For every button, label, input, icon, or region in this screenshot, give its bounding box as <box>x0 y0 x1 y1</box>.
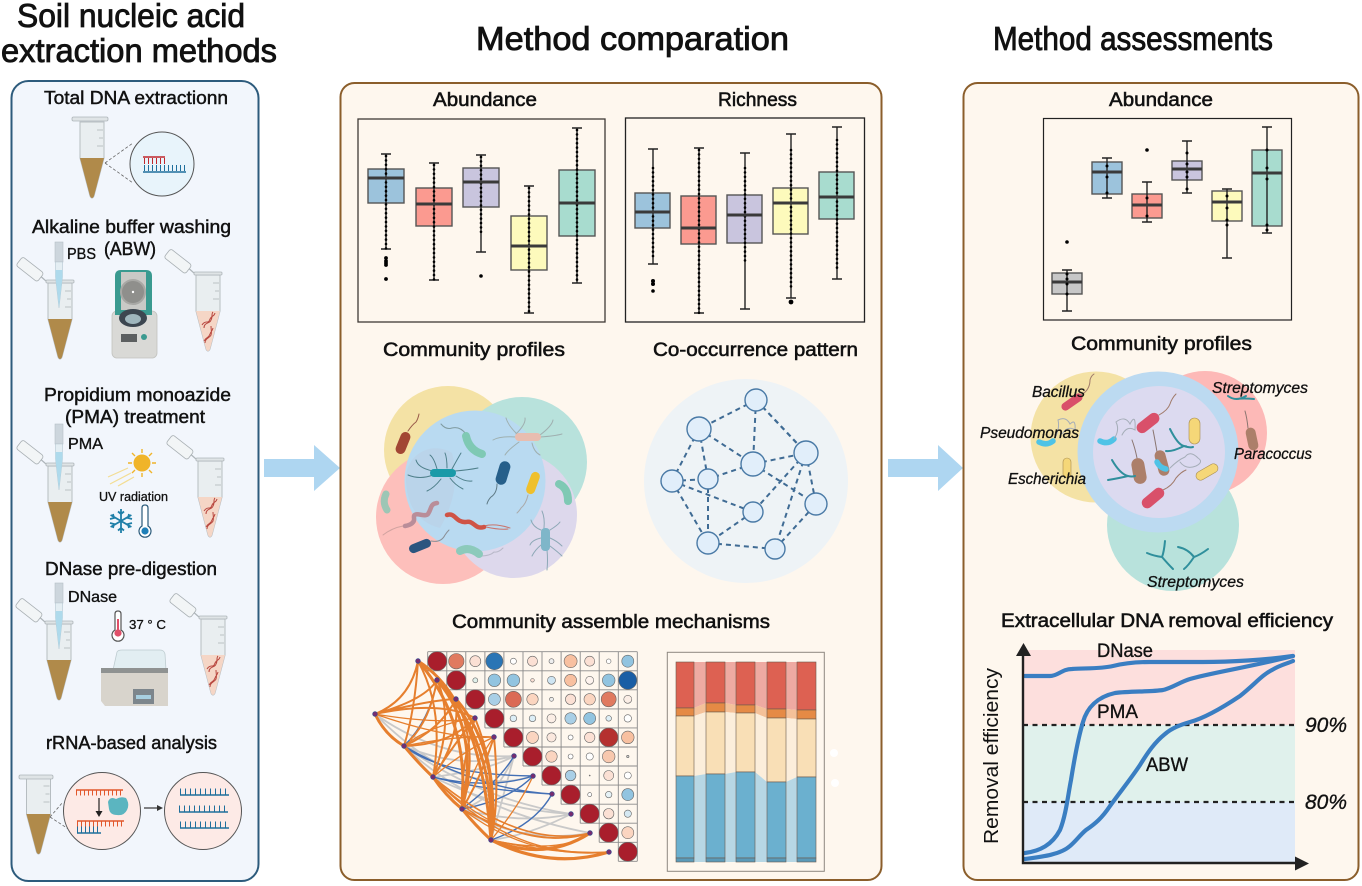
correlation matrix <box>428 652 637 861</box>
label: 80 percent: 80% <box>1305 791 1347 814</box>
label: PMA curve: PMA <box>1097 702 1138 723</box>
title: method comparation: Method comparation <box>476 20 789 57</box>
arrow: to amplified cDNA <box>144 805 163 811</box>
icon: tube with released DNA <box>164 249 222 351</box>
box plot: abundance <box>358 119 605 322</box>
icon: closed soil tube <box>72 117 108 198</box>
icon: sun with UV rays <box>108 449 156 486</box>
bacterium: teal curved bottom <box>460 548 503 556</box>
curve: PMA <box>1025 656 1293 853</box>
icon: water bath <box>101 650 168 706</box>
label: PMA: PMA <box>68 436 103 453</box>
label: propidium monoazide: Propidium monoazide <box>44 385 231 405</box>
bacteria: red rods <box>1060 374 1186 511</box>
box plot: abundance assessment <box>1044 118 1292 320</box>
icon: reverse transcription circle <box>50 772 140 850</box>
label: UV radiation: UV radiation <box>99 489 168 504</box>
panel: method comparation <box>340 83 882 880</box>
bacteria: cyan curved <box>1039 439 1166 469</box>
label: PMA treatment: (PMA) treatment <box>65 407 205 427</box>
bacteria: brown rods <box>1130 411 1259 485</box>
bacterium: navy rod bottom <box>408 530 449 554</box>
icon: soil tube with DNase pipette <box>15 583 73 700</box>
icon: soil tube with PMA pipette <box>16 424 74 542</box>
label: alkaline buffer washing: Alkaline buffer washing <box>32 217 231 237</box>
bacterium: teal curved top <box>441 424 482 454</box>
arrow: comparison to assessment <box>888 445 963 491</box>
bacterium: navy rod <box>487 460 512 504</box>
label: Pseudomonas: Pseudomonas <box>980 425 1079 442</box>
line chart: removal efficiency <box>981 641 1347 870</box>
label: Bacillus: Bacillus <box>1032 384 1085 401</box>
network: co-occurrence pattern <box>644 379 848 583</box>
label: removal efficiency axis: Removal efficiency <box>981 668 1003 844</box>
bacterium: blue rod with flagella <box>530 511 562 570</box>
icon: tube with released DNA after PMA <box>166 435 224 537</box>
network arcs: environmental links <box>375 661 609 859</box>
bacteria: teal branching <box>1108 396 1254 569</box>
icon: soil tube with PBS pipette <box>16 242 74 359</box>
bacteria: yellow rods <box>1063 418 1220 482</box>
title: soil nucleic acid extraction methods: extraction methods <box>1 32 277 69</box>
icon: warm thermometer <box>112 611 124 641</box>
icon: closed soil tube for rRNA <box>19 775 53 854</box>
heading: richness: Richness <box>718 90 797 111</box>
heading: community profiles: Community profiles <box>383 340 565 361</box>
curve: DNase <box>1025 656 1293 676</box>
icon: centrifuge <box>112 270 157 358</box>
label: ABW: (ABW) <box>104 239 156 259</box>
icon: DNA magnifier <box>105 132 194 196</box>
bacterium: teal curved left <box>384 494 387 510</box>
label: Streptomyces top: Streptomyces <box>1212 380 1308 397</box>
label: Paracoccus: Paracoccus <box>1234 446 1312 463</box>
icon: tube with released DNA after DNase <box>169 593 227 695</box>
flagella: pale tangles <box>1055 419 1201 468</box>
panel: method assessments <box>964 83 1358 880</box>
bacterium: yellow rod <box>517 471 541 513</box>
label: total DNA extraction: Total DNA extractionn <box>44 88 228 108</box>
venn diagram: community profiles <box>376 386 587 584</box>
bacterium: brown rod <box>394 414 419 456</box>
network nodes <box>373 659 611 854</box>
heading: co-occurrence pattern: Co-occurrence pattern <box>653 340 858 361</box>
bacterium: teal with flagella <box>408 453 478 491</box>
panel: soil nucleic acid extraction methods <box>12 81 258 881</box>
icon: cDNA strands circle <box>164 772 242 850</box>
axes <box>1016 643 1309 870</box>
curve: ABW <box>1025 661 1293 859</box>
bacterium: wavy mauve spirochete <box>383 503 437 535</box>
bacterium: teal curved right <box>559 484 568 501</box>
icon: cold thermometer <box>139 505 151 537</box>
label: PBS: PBS <box>67 246 96 263</box>
heading: community profiles assessment: Community profiles <box>1071 334 1252 355</box>
label: DNase pre-digestion: DNase pre-digestion <box>45 559 217 579</box>
label: 90 percent: 90% <box>1305 714 1347 737</box>
label: Escherichia: Escherichia <box>1008 471 1086 488</box>
arrow: extraction to comparison <box>264 445 340 491</box>
label: DNase curve: DNase <box>1097 641 1153 662</box>
bacterium: salmon with flagella <box>493 418 562 455</box>
bacterium: wavy red spirochete <box>447 514 510 529</box>
title: soil nucleic acid extraction methods <box>1 0 277 69</box>
heading: abundance assessment: Abundance <box>1109 90 1213 111</box>
label: rRNA-based analysis: rRNA-based analysis <box>46 733 217 753</box>
label: 37 degrees C: 37 ° C <box>129 617 166 632</box>
stacked bar chart <box>667 652 824 871</box>
label: ABW curve: ABW <box>1146 755 1188 776</box>
label: DNase: DNase <box>68 589 117 606</box>
heading: abundance: Abundance <box>433 90 537 111</box>
label: Streptomyces bottom: Streptomyces <box>1147 574 1244 591</box>
icon: snowflake <box>110 509 132 533</box>
heading: extracellular DNA removal efficiency: Extracellular DNA removal efficiency <box>1001 611 1334 632</box>
title: method assessments: Method assessments <box>993 20 1273 57</box>
venn diagram: assessed taxa <box>1030 371 1267 591</box>
box plot: richness <box>626 118 864 322</box>
heading: community assemble mechanisms: Community assemble mechanisms <box>452 612 770 633</box>
